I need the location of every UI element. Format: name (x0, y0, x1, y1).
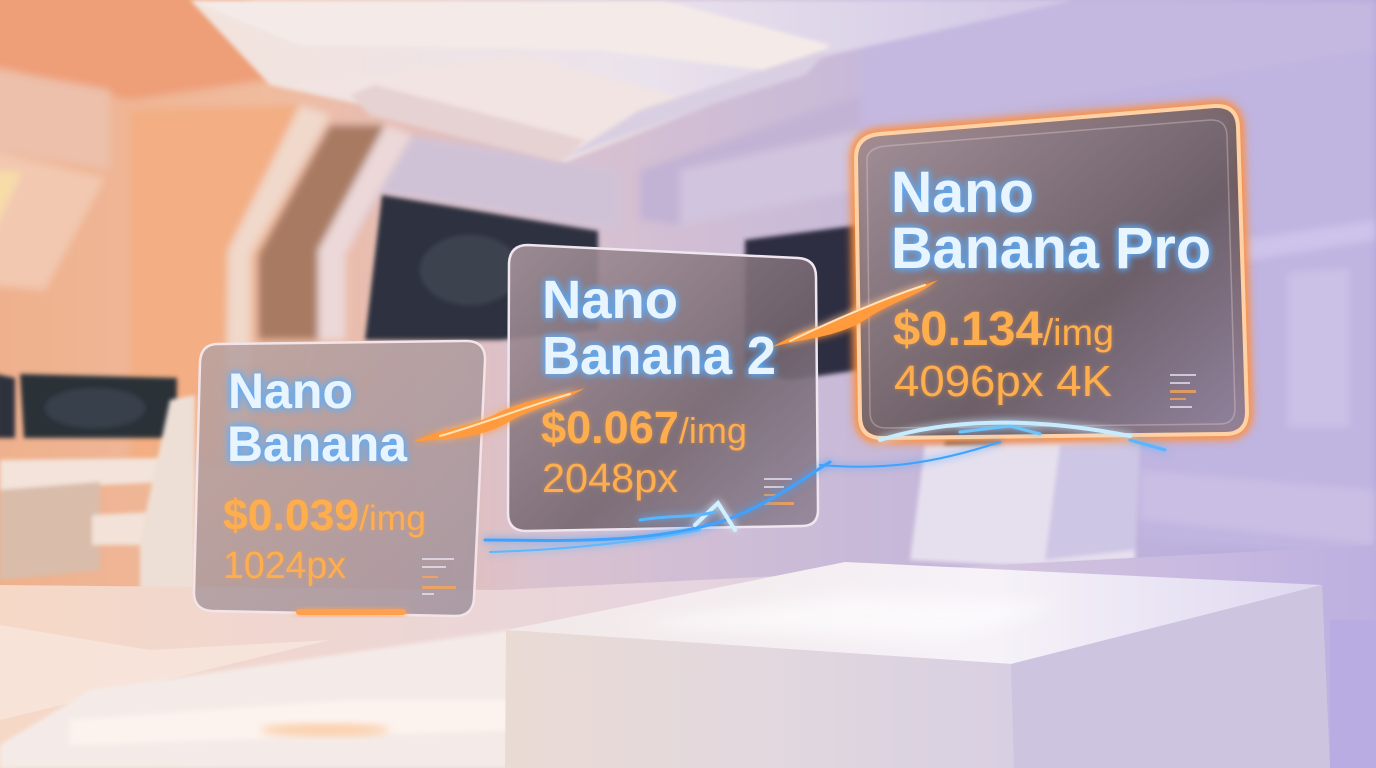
heading: Nano Banana Pro (891, 160, 1211, 281)
panel: Nano Banana Pro (856, 106, 1247, 438)
resolution: 4096px 4K (894, 357, 1112, 406)
foreground white counter (0, 630, 510, 768)
price: $0.067/img (541, 402, 747, 453)
heading: Nano Banana 2 (542, 270, 776, 386)
foreground pedestal (505, 562, 1330, 768)
heading: Nano Banana Pro: Nano (891, 160, 1034, 225)
heading: Nano Banana: Nano (228, 363, 353, 419)
heading: Nano Banana 2: Banana 2 (542, 326, 776, 386)
ceiling structure (190, 0, 1075, 162)
mini chart (764, 478, 794, 505)
resolution: 1024px (223, 545, 346, 587)
mini chart (422, 558, 456, 595)
panel: Nano Banana (194, 341, 485, 616)
heading: Nano Banana Pro: Banana Pro (891, 216, 1211, 281)
panel: Nano Banana 2 (508, 245, 818, 531)
heading: Nano Banana (227, 363, 408, 472)
floor (0, 545, 1376, 768)
resolution: 2048px (542, 455, 679, 501)
mini chart (1170, 374, 1196, 408)
glow bar (296, 609, 406, 615)
background monitors (0, 195, 1002, 490)
price: $0.039/img (223, 491, 426, 540)
price: $0.134/img (893, 303, 1114, 356)
energy stream: orange connectors between cards (412, 280, 938, 442)
right machine base (910, 440, 1140, 565)
heading: Nano Banana 2: Nano (542, 270, 678, 330)
left desk and chair (0, 395, 195, 612)
energy stream: blue circuits under cards (485, 423, 1165, 552)
heading: Nano Banana: Banana (227, 416, 408, 472)
